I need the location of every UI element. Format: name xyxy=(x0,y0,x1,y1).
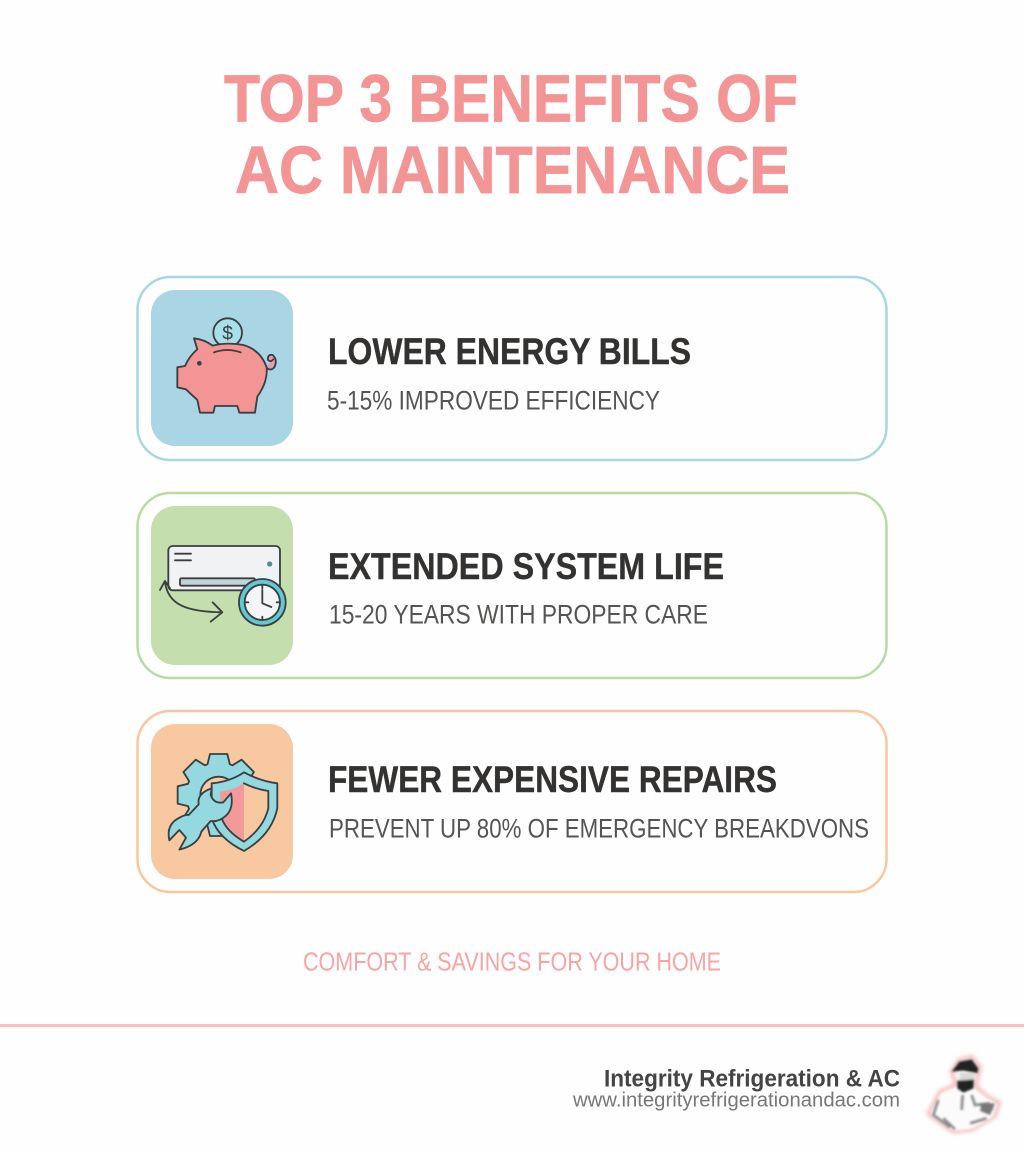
footer: company name and website: Integrity Refrigeration & AC xyxy=(604,1066,900,1092)
panel: fewer expensive repairs xyxy=(138,711,886,892)
heading: extended system life: EXTENDED SYSTEM LIFE xyxy=(328,546,724,587)
icon tile: piggy bank: $ xyxy=(222,323,233,344)
icon: technician logo xyxy=(928,1057,999,1132)
icon tile: gear, wrench and shield xyxy=(151,724,293,879)
tagline: COMFORT & SAVINGS FOR YOUR HOME xyxy=(303,948,721,976)
text: efficiency: 5-15% IMPROVED EFFICIENCY xyxy=(327,386,660,416)
panel: extended system life xyxy=(138,493,886,678)
footer: company name and website xyxy=(572,1066,900,1112)
text: breakdowns: PREVENT UP 80% OF EMERGENCY BREAKDVONS xyxy=(329,814,869,844)
panel: lower energy bills xyxy=(138,277,886,460)
heading: fewer expensive repairs: FEWER EXPENSIVE REPAIRS xyxy=(328,759,777,800)
title: TOP 3 BENEFITS OF xyxy=(224,62,798,136)
icon tile: air conditioner and clock xyxy=(151,506,293,665)
text: lifespan: 15-20 YEARS WITH PROPER CARE xyxy=(329,600,708,630)
heading: lower energy bills: LOWER ENERGY BILLS xyxy=(328,331,691,372)
title: AC MAINTENANCE xyxy=(235,133,790,208)
title xyxy=(224,62,798,208)
icon tile: piggy bank xyxy=(151,290,293,446)
footer: company name and website: www.integrityrefrigerationandac.com xyxy=(572,1088,900,1112)
